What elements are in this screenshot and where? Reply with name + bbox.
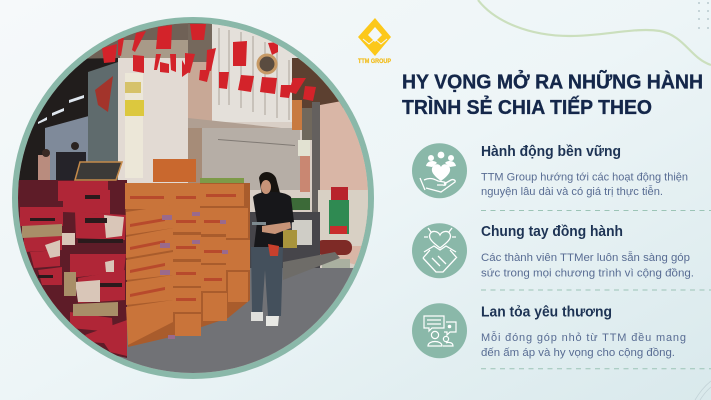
description: nguyện lâu dài và có giá trị thực tiễn.	[481, 185, 663, 198]
heading: Lan tỏa yêu thương	[481, 304, 612, 320]
description: đến ấm áp và hy vọng cho cộng đồng.	[481, 347, 675, 359]
description: sức trong mọi chương trình vì cộng đồng.	[481, 268, 694, 280]
description	[481, 251, 694, 280]
decorative dot grid	[698, 2, 709, 29]
logo: TTM Group	[358, 18, 391, 65]
heading: Hành động bền vững	[481, 144, 621, 160]
description	[481, 331, 686, 359]
photo in circular frame	[12, 17, 375, 380]
flags bunting	[102, 24, 316, 101]
wall lantern	[258, 55, 276, 73]
title: HY VỌNG MỞ RA NHỮNG HÀNH	[402, 70, 703, 94]
people in the background	[38, 155, 50, 180]
decorative green curve	[478, 0, 711, 65]
steps and ground	[32, 268, 354, 373]
icon: hands holding heart with people	[412, 143, 467, 198]
dark interior	[12, 58, 118, 185]
truck rear	[318, 190, 368, 246]
logo text: TTM GROUP	[358, 59, 391, 65]
ceiling and upper facade	[83, 23, 212, 62]
title: TRÌNH SẺ CHIA TIẾP THEO	[402, 96, 652, 119]
right building	[292, 58, 343, 108]
description: Các thành viên TTMer luôn sẵn sàng góp	[481, 251, 690, 264]
item: Hành động bền vững	[412, 143, 688, 198]
heading: Chung tay đồng hành	[481, 224, 623, 240]
woman with clipboard	[251, 172, 294, 326]
item: Lan tỏa yêu thương	[412, 303, 686, 359]
icon: handshake with heart	[412, 223, 467, 278]
chalkboard sign	[75, 162, 122, 180]
pillar	[188, 23, 212, 54]
decorative corner lines	[695, 381, 711, 400]
description	[481, 172, 688, 198]
white wall	[118, 58, 188, 183]
description: TTM Group hướng tới các hoạt động thiện	[481, 172, 688, 184]
plants and planter	[291, 198, 310, 210]
item: Chung tay đồng hành	[412, 223, 694, 280]
red boxes stack	[18, 180, 127, 358]
description: Mỗi đóng góp nhỏ từ TTM đều mang	[481, 331, 686, 344]
orange boxes stack	[125, 183, 250, 347]
icon: speech bubbles with people	[412, 303, 467, 358]
title	[402, 70, 703, 119]
